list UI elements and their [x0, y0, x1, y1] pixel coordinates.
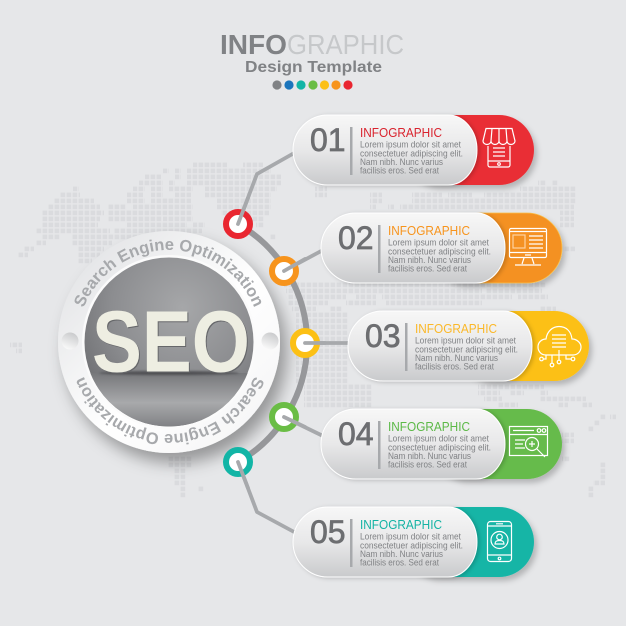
body text: Nam nibh. Nunc varius: [415, 353, 498, 363]
body text: [415, 336, 518, 372]
grey pill: [321, 409, 505, 479]
panel 04: [321, 409, 562, 479]
colour tab: [403, 507, 534, 577]
ring text top: Search Engine Optimization: [74, 240, 262, 307]
icon: browser search: [510, 426, 548, 457]
inner disc: [84, 257, 254, 427]
number: 03: [365, 318, 401, 354]
number: 01: [310, 122, 346, 158]
body text: consectetuer adipiscing elit.: [388, 442, 491, 452]
SEO word shadow: SEO: [93, 294, 251, 392]
ring text bottom: Search Engine Optimization: [76, 377, 264, 444]
divider: [405, 323, 408, 371]
body text: [360, 140, 463, 176]
right button: [262, 332, 278, 350]
arc: [238, 224, 307, 462]
SEO word: SEO: [92, 294, 250, 390]
body text: facilisis eros. Sed erat: [388, 460, 467, 470]
divider: [350, 519, 352, 567]
colour tab: [458, 311, 589, 381]
icon: smartphone user: [488, 522, 512, 562]
heading: INFOGRAPHIC: [388, 420, 470, 434]
connector lines: [238, 152, 350, 533]
disc rim: [82, 255, 256, 429]
colour tab: [403, 115, 534, 185]
divider: [378, 421, 380, 469]
node: yellow: [293, 331, 325, 355]
dotted world map: [10, 162, 616, 497]
body text: Nam nibh. Nunc varius: [388, 255, 471, 265]
body text: consectetuer adipiscing elit.: [415, 344, 518, 354]
grey pill: [348, 311, 532, 381]
body text: consectetuer adipiscing elit.: [360, 540, 463, 550]
body text: Lorem ipsum dolor sit amet: [360, 532, 461, 542]
divider: [350, 127, 352, 175]
SEO badge: [56, 231, 296, 472]
heading: INFOGRAPHIC: [360, 126, 442, 140]
number: 02: [338, 220, 374, 256]
body text: consectetuer adipiscing elit.: [388, 246, 491, 256]
body text: facilisis eros. Sed erat: [415, 362, 494, 372]
body text: consectetuer adipiscing elit.: [360, 148, 463, 158]
panel 02: [321, 213, 562, 283]
number: 05: [310, 514, 346, 550]
title: GRAPHIC: [287, 29, 404, 60]
colour tab: [431, 409, 562, 479]
panel 03: [348, 311, 589, 381]
title: INFO: [220, 29, 287, 60]
panel 01: [293, 115, 534, 185]
body text: Nam nibh. Nunc varius: [360, 157, 443, 167]
number: 04: [338, 416, 374, 452]
node: teal: [226, 450, 250, 488]
grey pill: [293, 507, 477, 577]
icon: store: [483, 128, 515, 167]
heading: INFOGRAPHIC: [388, 224, 470, 238]
left button: [62, 332, 78, 350]
grey pill: [293, 115, 477, 185]
node: green: [272, 405, 305, 429]
body text: facilisis eros. Sed erat: [388, 264, 467, 274]
panel 05: [293, 507, 534, 577]
outer ring: [58, 231, 280, 453]
body text: [388, 238, 491, 274]
body text: facilisis eros. Sed erat: [360, 558, 439, 568]
heading: INFOGRAPHIC: [415, 322, 497, 336]
divider: [378, 225, 380, 273]
colour dots: [272, 80, 353, 90]
node: orange: [272, 259, 305, 283]
icon: cloud network: [538, 326, 581, 367]
body text: [360, 532, 463, 568]
body text: Lorem ipsum dolor sit amet: [360, 140, 461, 150]
body text: Nam nibh. Nunc varius: [388, 451, 471, 461]
body text: facilisis eros. Sed erat: [360, 166, 439, 176]
title: [220, 29, 404, 60]
body text: Lorem ipsum dolor sit amet: [388, 238, 489, 248]
heading: INFOGRAPHIC: [360, 518, 442, 532]
icon: monitor: [510, 228, 546, 265]
colour tab: [431, 213, 562, 283]
body text: Lorem ipsum dolor sit amet: [388, 434, 489, 444]
body text: Lorem ipsum dolor sit amet: [415, 336, 516, 346]
body text: [388, 434, 491, 470]
subtitle: Design Template: [245, 59, 382, 76]
grey pill: [321, 213, 505, 283]
node: red: [226, 198, 250, 236]
body text: Nam nibh. Nunc varius: [360, 549, 443, 559]
